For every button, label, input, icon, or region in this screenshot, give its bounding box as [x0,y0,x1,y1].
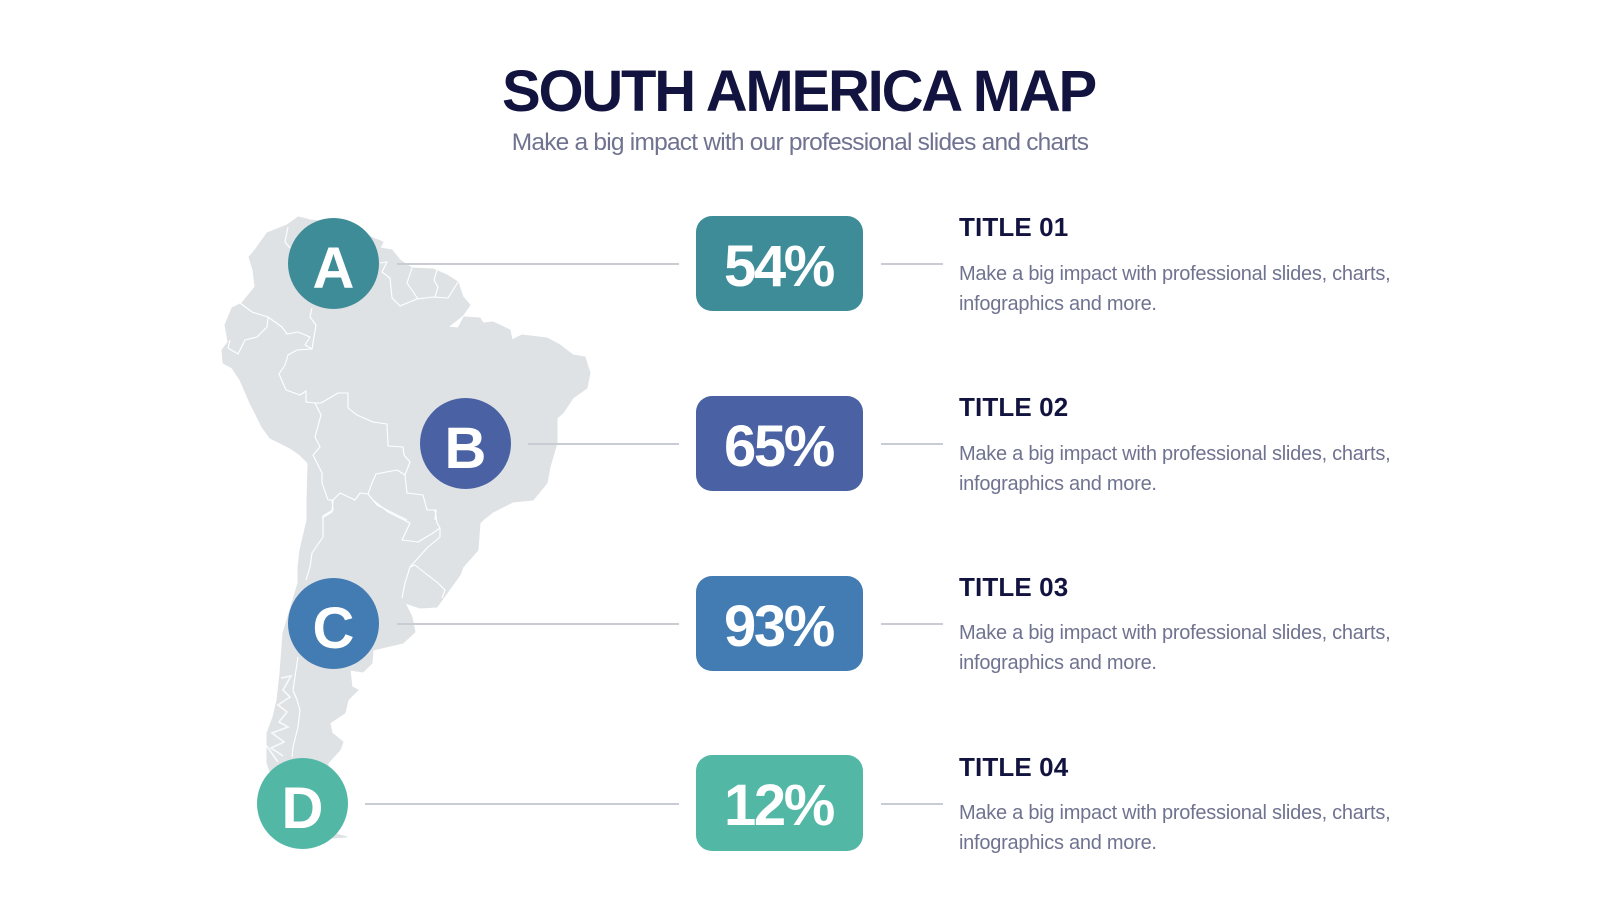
percentage 65%: 65% [724,414,833,479]
heading: title 04: TITLE 04 [959,752,1068,782]
percentage 93%: 93% [724,594,833,659]
text block 02 [959,443,1390,495]
marker C [288,578,379,669]
marker D [257,758,348,849]
subtitle: Make a big impact with our professional slides and charts [512,129,1088,156]
title: SOUTH AMERICA MAP [502,59,1095,124]
map of South America [222,216,590,838]
marker A: A [313,236,354,301]
percentage 65% [696,396,863,491]
text block 03: infographics and more. [959,652,1157,674]
percentage 93% [696,576,863,671]
text block 02: Make a big impact with professional slides, charts, [959,443,1390,465]
text block 01 [959,263,1390,315]
marker A [288,218,379,309]
heading: title 01: TITLE 01 [959,212,1068,242]
percentage 54%: 54% [724,234,833,299]
text block 04: infographics and more. [959,832,1157,854]
marker B [420,398,511,489]
text block 04: Make a big impact with professional slides, charts, [959,802,1390,824]
text block 02: infographics and more. [959,473,1157,495]
text block 01: Make a big impact with professional slides, charts, [959,263,1390,285]
marker B: B [445,416,486,481]
percentage 12% [696,755,863,851]
marker C: C [313,596,354,661]
text block 03: Make a big impact with professional slides, charts, [959,622,1390,644]
marker D: D [282,776,323,841]
text block 03 [959,622,1390,674]
text block 04 [959,802,1390,854]
text block 01: infographics and more. [959,293,1157,315]
percentage 54% [696,216,863,311]
percentage 12%: 12% [724,773,833,838]
heading: title 03: TITLE 03 [959,572,1068,602]
heading: title 02: TITLE 02 [959,392,1068,422]
